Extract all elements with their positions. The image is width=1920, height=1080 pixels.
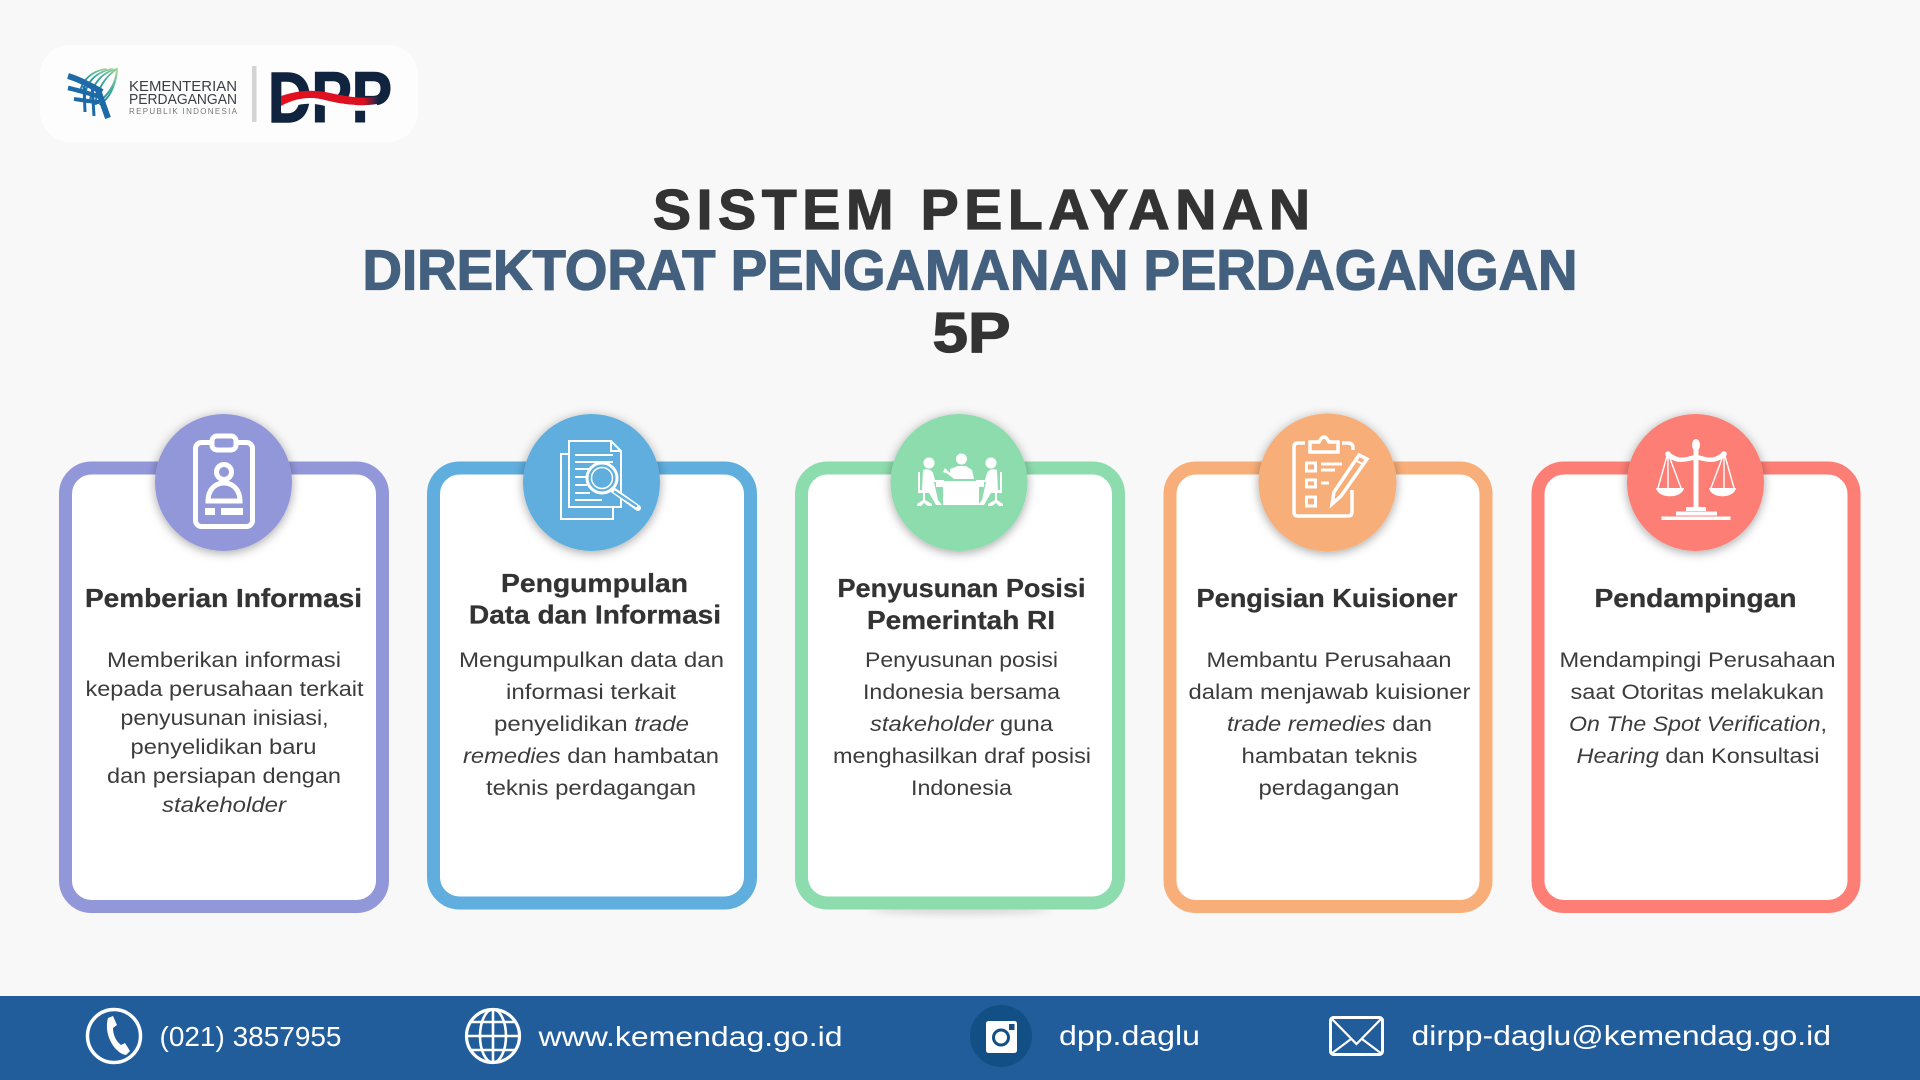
- heading: Pemberian Informasi: [85, 583, 362, 613]
- body text: On The Spot Verification ,: [1569, 713, 1827, 736]
- body text: [459, 649, 724, 800]
- body text: [86, 649, 364, 817]
- body text: hambatan teknis: [1242, 745, 1418, 768]
- logo wordmark: [129, 79, 238, 116]
- logo wordmark: PERDAGANGAN: [129, 92, 237, 108]
- contact: website: [466, 1010, 842, 1062]
- body text: Memberikan informasi: [107, 649, 341, 672]
- icon circle: [1627, 414, 1764, 551]
- heading: Penyusunan Posisi: [838, 573, 1086, 603]
- panel: pengisian kuisioner: [1170, 414, 1486, 906]
- body text: Membantu Perusahaan: [1206, 649, 1452, 672]
- title: [362, 178, 1578, 365]
- body text: Indonesia: [911, 777, 1012, 800]
- body text: stakeholder guna: [870, 713, 1053, 736]
- icon: questionnaire: [1294, 437, 1367, 516]
- body text: informasi terkait: [506, 681, 676, 704]
- body text: kepada perusahaan terkait: [86, 678, 364, 701]
- panel: penyusunan posisi: [802, 414, 1118, 903]
- icon circle: [890, 414, 1028, 551]
- body text: saat Otoritas melakukan: [1570, 681, 1824, 704]
- body text: Mengumpulkan data dan: [459, 649, 724, 672]
- heading: Pengumpulan: [501, 568, 688, 598]
- panel: pendampingan: [1538, 414, 1854, 906]
- contact: email: [1330, 1018, 1831, 1054]
- logo wordmark: REPUBLIK INDONESIA: [129, 107, 238, 116]
- body text: [1188, 649, 1470, 800]
- heading: Pemerintah RI: [867, 605, 1055, 635]
- footer bar: [0, 996, 1920, 1080]
- body text: Indonesia bersama: [863, 681, 1060, 704]
- body text: penyelidikan trade: [494, 713, 689, 736]
- body text: penyelidikan baru: [130, 736, 316, 759]
- icon: kementerian perdagangan emblem: [68, 69, 117, 118]
- icon circle: [523, 414, 660, 551]
- icon circle: [155, 414, 292, 551]
- body text: [833, 649, 1091, 800]
- body text: penyusunan inisiasi,: [120, 707, 328, 730]
- body text: stakeholder: [162, 794, 287, 817]
- title line 3: 5P: [932, 301, 1010, 365]
- heading: Data dan Informasi: [469, 600, 721, 630]
- panel: logo: [40, 45, 418, 142]
- body text: dalam menjawab kuisioner: [1188, 681, 1470, 704]
- panel: pemberian informasi: [66, 414, 382, 906]
- body text: menghasilkan draf posisi: [833, 745, 1091, 768]
- body text: Penyusunan posisi: [865, 649, 1058, 672]
- icon: scales: [1656, 439, 1736, 520]
- body text: dan persiapan dengan: [107, 765, 341, 788]
- contact: email: dirpp-daglu@kemendag.go.id: [1412, 1020, 1831, 1051]
- icon: document search: [561, 441, 638, 519]
- title line 1: SISTEM PELAYANAN: [653, 178, 1310, 242]
- icon: id badge: [196, 436, 252, 526]
- contact: website: www.kemendag.go.id: [537, 1021, 842, 1052]
- body text: Mendampingi Perusahaan: [1560, 649, 1836, 672]
- body text: [1560, 649, 1836, 768]
- icon: meeting: [917, 454, 1003, 506]
- body text: teknis perdagangan: [486, 777, 696, 800]
- logo wordmark: KEMENTERIAN: [129, 79, 237, 95]
- body text: Hearing dan Konsultasi: [1576, 745, 1820, 768]
- icon circle: [1258, 414, 1396, 552]
- panel: pengumpulan data: [434, 414, 750, 903]
- heading: Pendampingan: [1594, 583, 1796, 613]
- body text: trade remedies dan: [1227, 713, 1432, 736]
- heading: [838, 573, 1086, 635]
- logo: DPP: DPP: [268, 59, 392, 138]
- contact: instagram: [970, 1005, 1200, 1067]
- body text: perdagangan: [1258, 777, 1400, 800]
- contact: phone: (021) 3857955: [160, 1021, 342, 1052]
- body text: remedies dan hambatan: [463, 745, 719, 768]
- contact: phone: [88, 1010, 342, 1062]
- heading: [469, 568, 721, 630]
- contact: instagram: dpp.daglu: [1059, 1020, 1200, 1051]
- title line 2: DIREKTORAT PENGAMANAN PERDAGANGAN: [362, 238, 1578, 302]
- shadow under card 3: [870, 906, 1050, 914]
- heading: Pengisian Kuisioner: [1196, 583, 1458, 613]
